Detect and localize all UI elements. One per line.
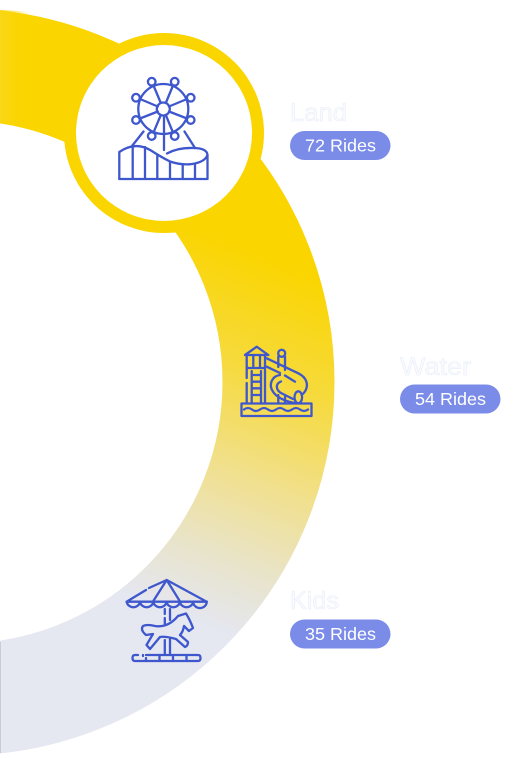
label: Kids	[290, 587, 390, 648]
highlighted circle badge	[64, 33, 264, 233]
pill: 72 Rides: 72 Rides	[305, 136, 376, 156]
yellow to lavender ring	[0, 10, 278, 753]
label: Kids: Kids	[290, 587, 339, 615]
label: Land: Land	[290, 99, 347, 127]
label: Water: Water	[400, 353, 471, 381]
label: Water	[400, 353, 500, 414]
icon: water slide	[242, 347, 312, 416]
icon: carousel	[127, 580, 207, 661]
icon: ferris wheel and roller coaster	[119, 78, 208, 179]
label: Land	[290, 99, 390, 160]
pill: 35 Rides: 35 Rides	[305, 624, 376, 644]
pill: 54 Rides: 54 Rides	[415, 389, 486, 409]
